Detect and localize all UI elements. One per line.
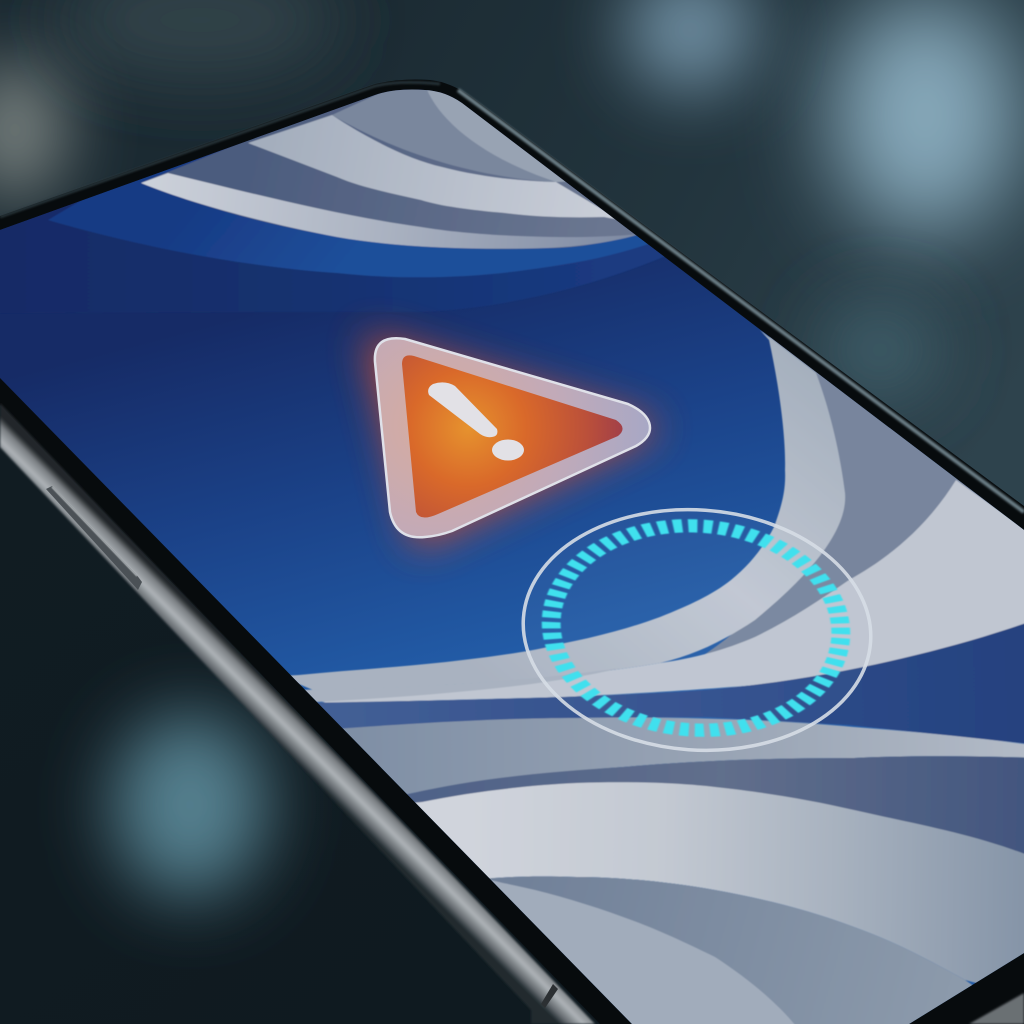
ring glass fill [515, 498, 879, 762]
top grey field [152, 94, 636, 250]
swoosh shadow streak [304, 672, 602, 703]
rim joint [541, 984, 558, 1008]
lower grey band [320, 717, 1024, 800]
lower light band [414, 782, 1024, 984]
main right swoosh [280, 330, 845, 690]
right light band [280, 480, 1024, 703]
bright blue band [48, 146, 648, 278]
bottom light sliver [491, 880, 794, 1024]
ring cyan dashes [544, 516, 848, 740]
right grey field [660, 335, 1024, 680]
ring outer outline [515, 498, 879, 762]
progress ring [515, 498, 879, 762]
triangle inner fill [402, 355, 623, 518]
dark upper band [0, 201, 664, 311]
top right frame highlight [458, 90, 1024, 512]
phone metal side rim [0, 403, 595, 1024]
lower dark strip [407, 756, 1024, 854]
side button [46, 486, 142, 590]
lower blue band [290, 618, 1024, 745]
icon: alert triangle [372, 338, 650, 540]
light sliver [425, 80, 600, 182]
bottom grey band [490, 876, 973, 1024]
exclamation mark [428, 382, 524, 460]
white top curve [248, 115, 620, 220]
alert glow [372, 342, 650, 540]
triangle outer glass frame [375, 338, 650, 537]
top left frame edge [0, 82, 440, 217]
white top stripe [141, 173, 640, 249]
bottom right rim [969, 993, 1024, 1024]
grey top right [332, 70, 600, 182]
